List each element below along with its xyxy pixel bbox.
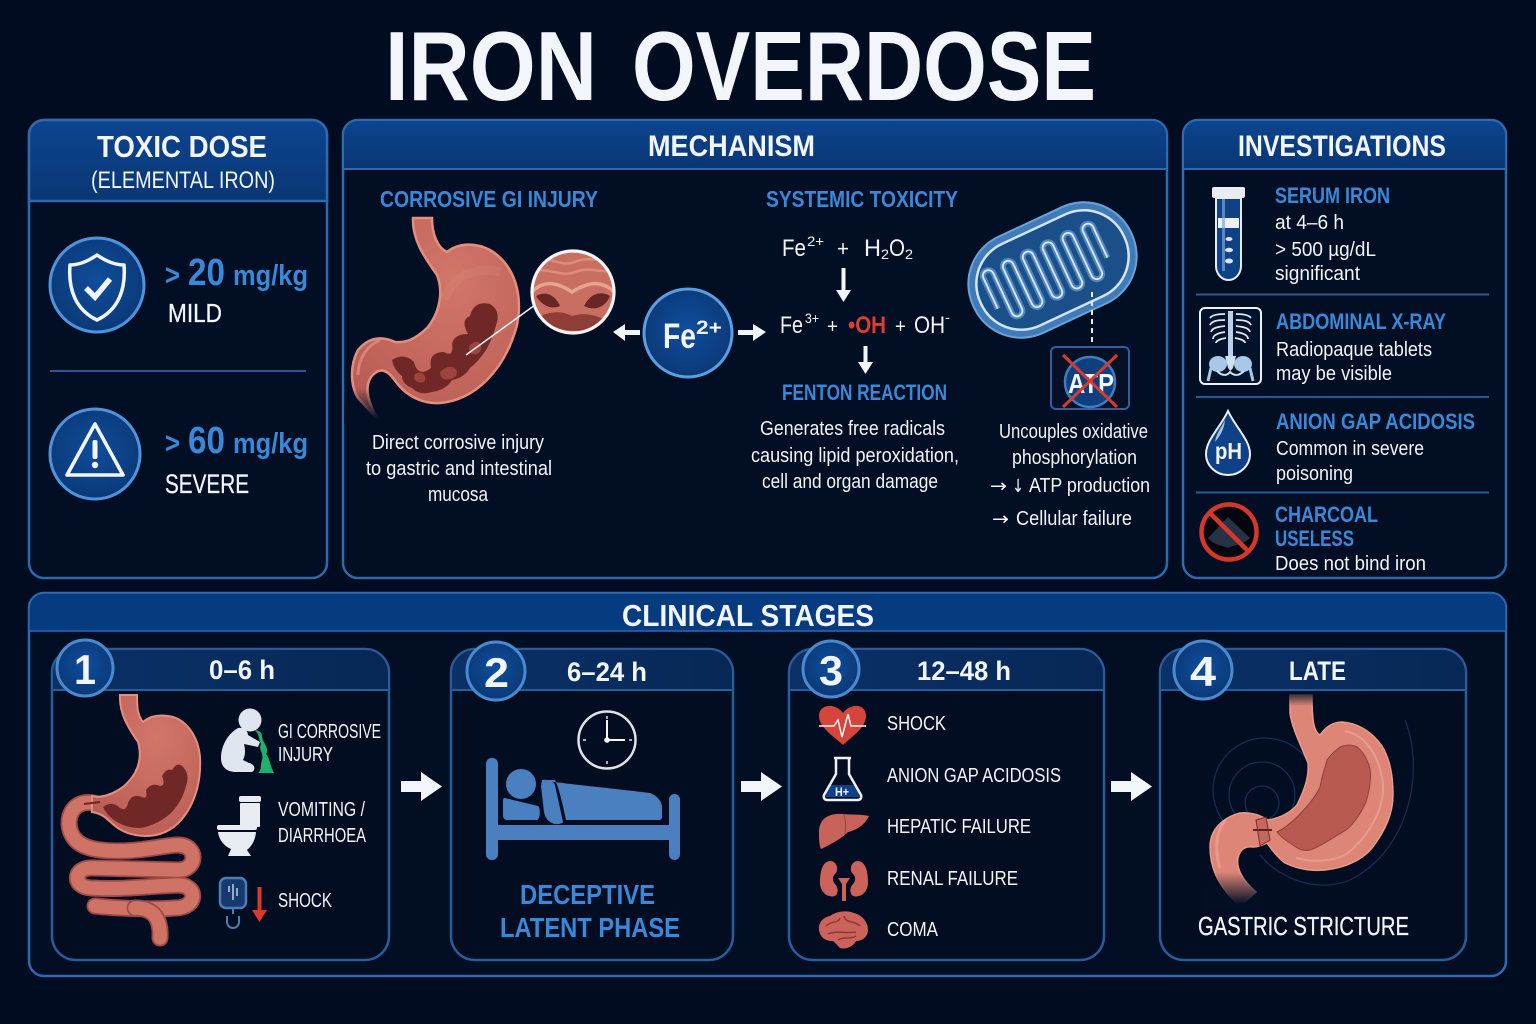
dashed connector	[1091, 292, 1093, 346]
icon: pH drop: pH	[1215, 438, 1242, 464]
badge: 2: 2	[484, 649, 509, 696]
equation: reactants: O	[889, 235, 905, 262]
label: gi corrosive injury: GI CORROSIVE	[278, 721, 381, 743]
icon: patient in bed	[486, 758, 680, 860]
time: 6-24 h: 6–24 h	[567, 657, 647, 687]
badge: 3: 3	[819, 647, 843, 694]
text: ATP effects	[990, 421, 1150, 530]
text: corrosive injury description	[366, 432, 552, 506]
card: stage 4	[1160, 641, 1466, 960]
dose: mild value: mg/kg	[233, 260, 308, 292]
text: abdominal x-ray: ABDOMINAL X-RAY	[1276, 309, 1446, 334]
illustration: ulcerated stomach	[344, 218, 519, 424]
equation: reactants: 2	[905, 246, 913, 262]
label: renal failure: RENAL FAILURE	[887, 868, 1018, 890]
arrow: down to products	[836, 268, 851, 302]
label: gi corrosive injury: INJURY	[278, 744, 333, 766]
text: serum iron: significant	[1275, 263, 1360, 285]
icon: flask H+	[824, 758, 861, 800]
equation: products: +	[827, 316, 838, 338]
title: IRON	[385, 11, 597, 121]
callout: magnified mucosa	[530, 251, 616, 333]
icon: heart with ecg	[819, 706, 866, 745]
title: OVERDOSE	[632, 11, 1096, 121]
icon: flask H+: H+	[835, 785, 849, 799]
icon: warning triangle	[50, 409, 140, 499]
arrow: right from Fe	[738, 324, 766, 341]
illustration: stomach and intestine	[69, 695, 200, 938]
text: ATP effects: ↓	[1012, 476, 1024, 497]
label: gi corrosive injury	[278, 721, 381, 766]
arrow: stage 2 to 3	[741, 772, 782, 801]
dose: severe value: >	[165, 427, 180, 460]
badge: 3	[803, 641, 859, 697]
text: ATP effects: →	[992, 509, 1009, 530]
equation: reactants	[782, 233, 913, 262]
text: corrosive injury description: to gastric and intestinal	[366, 458, 552, 480]
callout line to magnified mucosa	[466, 305, 535, 355]
text: anion gap acidosis: ANION GAP ACIDOSIS	[1276, 409, 1475, 434]
label: vomiting / diarrhoea	[278, 799, 366, 847]
equation: reactants: 2+	[807, 233, 824, 249]
node: Fe2+: 2+	[696, 318, 722, 339]
time: 0-6 h: 0–6 h	[209, 655, 275, 685]
equation: reactants: Fe	[782, 235, 806, 262]
icon: vomiting person	[221, 708, 274, 773]
arrow: stage 1 to 2	[401, 772, 442, 801]
equation: reactants: 2	[881, 246, 889, 262]
equation: products: OH	[914, 312, 945, 339]
label: deceptive latent phase: LATENT PHASE	[500, 912, 680, 943]
heading: investigations: INVESTIGATIONS	[1238, 130, 1446, 163]
text: charcoal useless	[1275, 502, 1426, 575]
subheading: systemic toxicity: SYSTEMIC TOXICITY	[766, 186, 958, 212]
text: abdominal x-ray: may be visible	[1276, 363, 1392, 385]
equation: products	[780, 309, 950, 339]
arrow: left from Fe	[613, 324, 640, 341]
badge: 2	[467, 642, 525, 700]
label: mild: MILD	[168, 298, 222, 328]
label: hepatic failure: HEPATIC FAILURE	[887, 816, 1031, 838]
text: abdominal x-ray	[1276, 309, 1446, 385]
text: charcoal useless: USELESS	[1275, 526, 1354, 551]
icon: x-ray	[1200, 308, 1261, 384]
text: serum iron: > 500 µg/dL	[1275, 239, 1376, 261]
badge: 1	[57, 640, 113, 696]
heading: mechanism: MECHANISM	[648, 130, 815, 163]
icon: charcoal prohibited	[1202, 504, 1256, 560]
dose: mild value: >	[165, 259, 180, 292]
icon: blocked ATP: ATP	[1068, 368, 1114, 399]
label: gastric stricture: GASTRIC STRICTURE	[1198, 911, 1409, 941]
arrow: down to Fenton reaction	[858, 346, 873, 374]
text: serum iron: SERUM IRON	[1275, 183, 1390, 208]
icon: low blood pressure	[220, 878, 267, 928]
card: stage 1	[52, 640, 389, 960]
equation: products: +	[895, 316, 906, 338]
dose: mild value	[165, 252, 308, 294]
card: stage 3	[789, 641, 1104, 960]
node: Fe2+	[644, 289, 732, 377]
panel: mechanism	[343, 120, 1167, 578]
icon: brain	[819, 911, 868, 949]
text: charcoal useless: CHARCOAL	[1275, 502, 1378, 527]
heading: toxic dose: TOXIC DOSE	[97, 129, 267, 164]
time: late: LATE	[1289, 656, 1346, 686]
icon: test tube	[1212, 187, 1245, 280]
text: corrosive injury description: mucosa	[428, 484, 489, 506]
label: shock: SHOCK	[887, 713, 947, 735]
dose: severe value: mg/kg	[233, 428, 308, 460]
text: charcoal useless: Does not bind iron	[1275, 553, 1426, 575]
icon: liver	[819, 814, 869, 849]
decorative scar rings	[1213, 720, 1413, 885]
text: serum iron: at 4–6 h	[1275, 212, 1344, 234]
text: ATP effects: Cellular failure	[1016, 508, 1132, 530]
text: Fenton description: causing lipid peroxidation,	[751, 445, 959, 467]
label: anion gap acidosis: ANION GAP ACIDOSIS	[887, 765, 1061, 787]
subheading: elemental iron: (ELEMENTAL IRON)	[91, 167, 275, 194]
badge: 1: 1	[74, 646, 96, 693]
equation: reactants: H	[864, 235, 881, 262]
card: stage 2	[451, 642, 733, 960]
text: abdominal x-ray: Radiopaque tablets	[1276, 339, 1432, 361]
label: vomiting / diarrhoea: VOMITING /	[278, 799, 365, 821]
icon: clock	[578, 712, 636, 768]
text: corrosive injury description: Direct corrosive injury	[372, 432, 544, 454]
icon: blocked ATP	[1051, 347, 1129, 409]
panel: investigations	[1183, 120, 1506, 578]
equation: reactants: +	[837, 236, 849, 261]
label: shock: SHOCK	[278, 890, 332, 912]
dose: severe value	[165, 420, 308, 462]
time: 12-48 h: 12–48 h	[917, 656, 1011, 686]
panel: clinical stages	[29, 593, 1506, 976]
text: Fenton description: Generates free radicals	[760, 418, 945, 440]
dose: severe value: 60	[188, 420, 225, 462]
text: serum iron	[1275, 183, 1390, 285]
icon: pH drop	[1206, 411, 1250, 475]
label: vomiting / diarrhoea: DIARRHOEA	[278, 825, 366, 847]
node: Fe2+: Fe	[663, 317, 696, 356]
subheading: Fenton reaction: FENTON REACTION	[782, 380, 947, 405]
equation: products: -	[945, 309, 950, 325]
badge: 4	[1174, 641, 1232, 699]
badge: 4: 4	[1190, 648, 1217, 695]
panel: toxic dose	[29, 120, 327, 578]
label: deceptive latent phase: DECEPTIVE	[520, 879, 655, 910]
text: anion gap acidosis: poisoning	[1276, 463, 1353, 485]
label: severe: SEVERE	[165, 469, 249, 499]
dose: mild value: 20	[188, 252, 225, 294]
text: anion gap acidosis: Common in severe	[1276, 438, 1424, 460]
arrow: stage 3 to 4	[1111, 772, 1152, 801]
icon: shield with check	[50, 238, 144, 332]
equation: products: 3+	[805, 310, 819, 326]
equation: products: Fe	[780, 312, 803, 339]
text: ATP effects: Uncouples oxidative	[999, 421, 1148, 443]
label: deceptive latent phase	[500, 879, 680, 943]
equation: products: •OH	[848, 312, 886, 339]
heading: clinical stages: CLINICAL STAGES	[622, 598, 874, 633]
icon: toilet	[217, 796, 261, 856]
illustration: gastric stricture stomach	[1205, 692, 1393, 910]
text: Fenton description: cell and organ damage	[762, 471, 938, 493]
text: ATP effects: ATP production	[1029, 475, 1150, 497]
text: anion gap acidosis	[1276, 409, 1475, 485]
text: ATP effects: →	[990, 476, 1007, 497]
text: Fenton description	[751, 418, 959, 493]
text: ATP effects: phosphorylation	[1012, 447, 1137, 469]
title	[385, 11, 1096, 121]
illustration: mitochondrion	[967, 201, 1138, 339]
label: coma: COMA	[887, 919, 939, 941]
icon: kidneys	[820, 861, 868, 901]
subheading: corrosive gi injury: CORROSIVE GI INJURY	[380, 186, 598, 212]
